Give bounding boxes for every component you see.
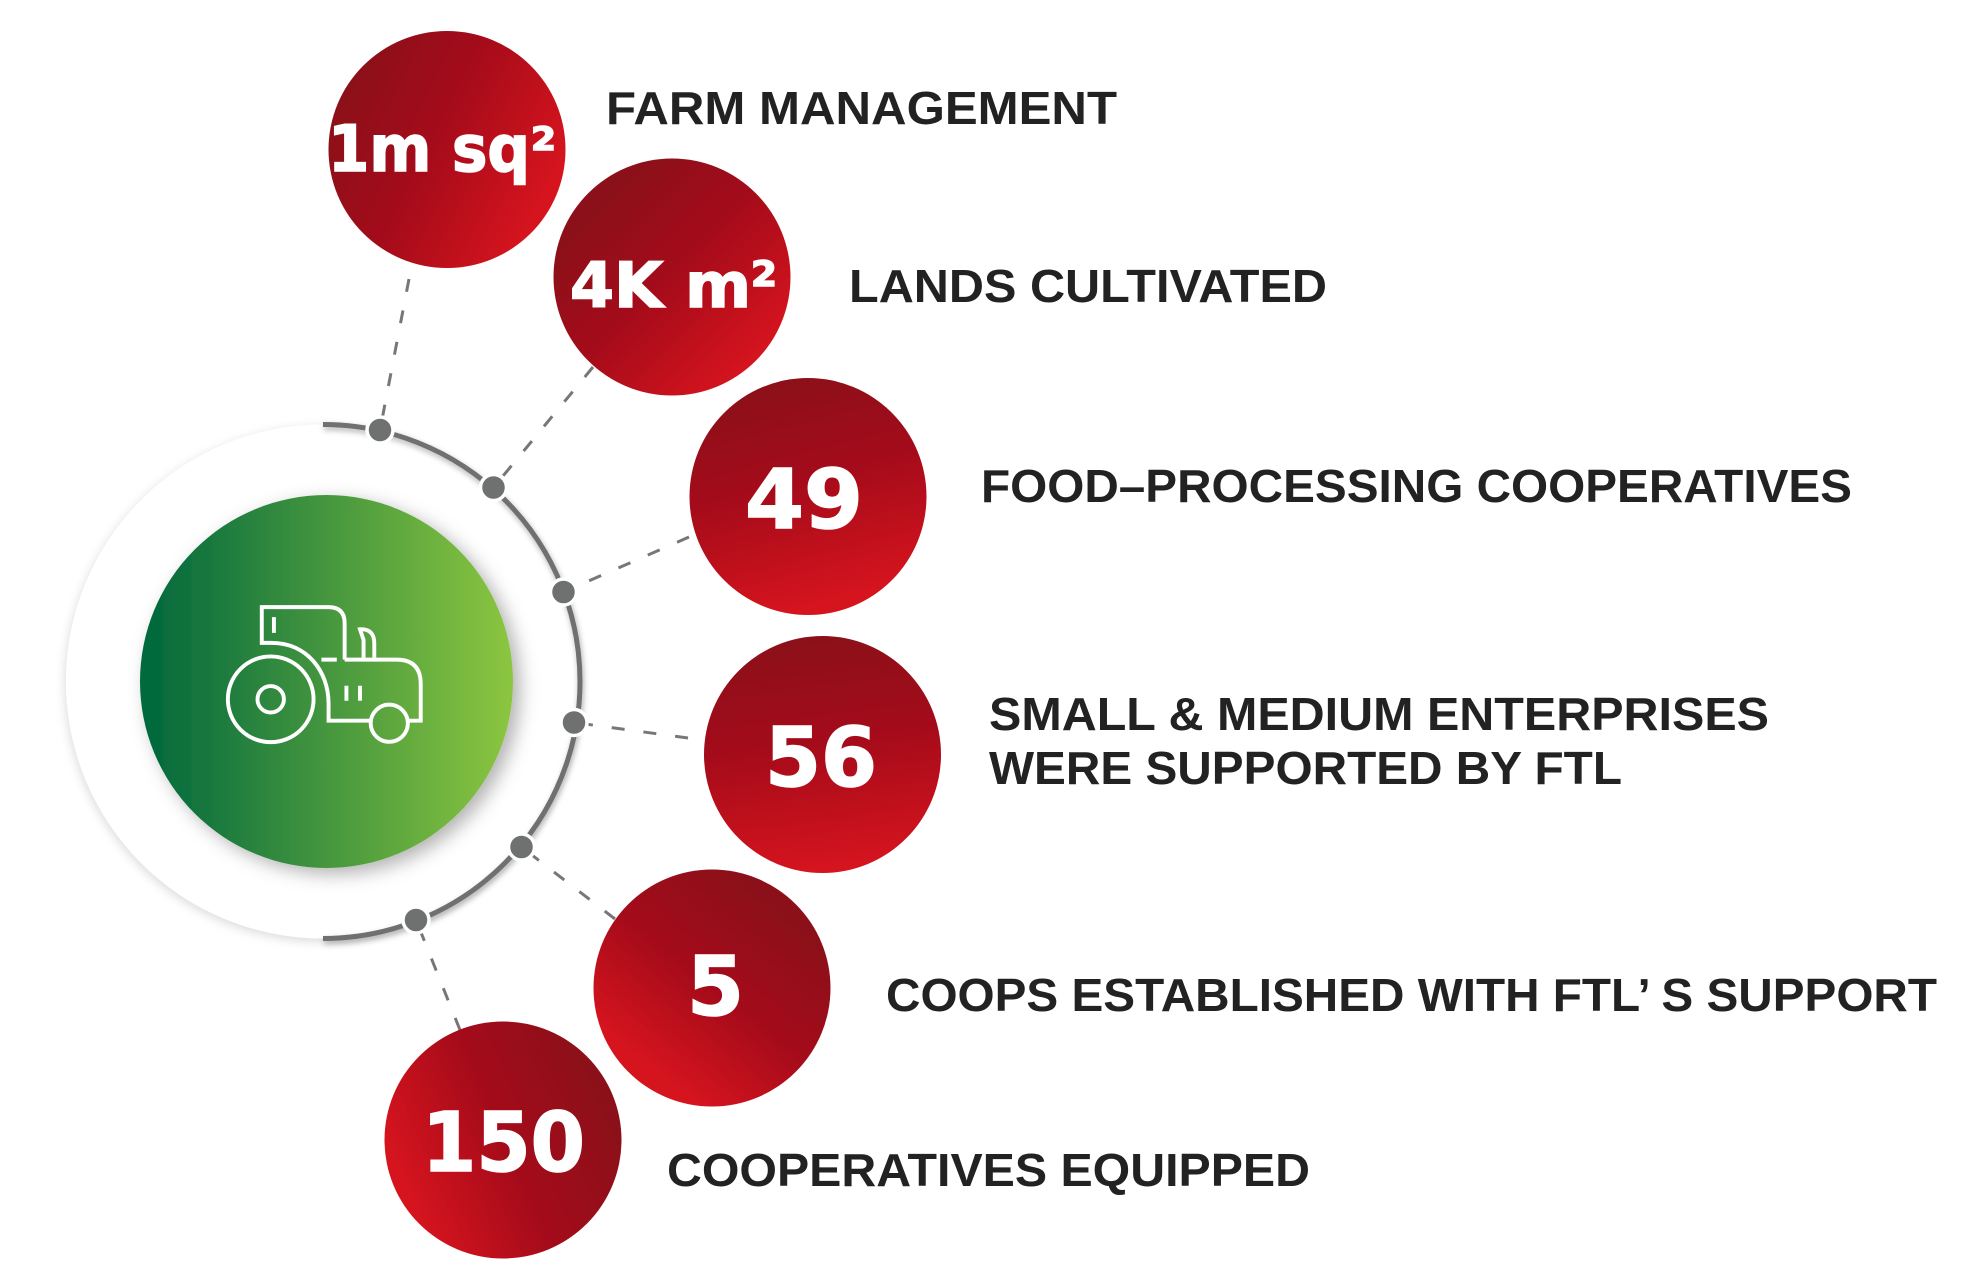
stat circle: 5: 5 [687,940,744,1035]
stat circle: 1m sq²: 1m sq [328,113,530,187]
stat circle: 1m sq²: 2 [531,120,556,158]
stat circle: 4K m²: 2 [751,255,777,295]
label: farm management: FARM MANAGEMENT [606,82,1117,134]
icon: tractor [228,607,421,742]
stat circle: 150 [384,1022,622,1258]
label: food-processing cooperatives: FOOD–PROCESSING COOPERATIVES [981,460,1852,512]
stat circle: 49: 49 [745,453,863,548]
stat circle: 150: 150 [422,1096,585,1191]
ring connection dots [367,417,587,933]
label: small and medium enterprises: SMALL & MEDIUM ENTERPRISES [989,688,1769,740]
stat circle: 4K m² [554,158,790,396]
label: small and medium enterprises [989,688,1769,794]
label: lands cultivated: LANDS CULTIVATED [849,260,1327,312]
stat circle: 56: 56 [765,711,877,806]
label: cooperatives equipped: COOPERATIVES EQUIPPED [667,1144,1310,1196]
stat circle: 49 [690,378,926,615]
label: small and medium enterprises: WERE SUPPORTED BY FTL [989,742,1622,794]
stat circle: 56 [704,636,941,873]
stat circle: 1m sq² [328,31,566,268]
green centre circle [140,495,513,868]
connector: dashed lines from ring to circles [380,279,689,1030]
white ring disc [66,424,580,938]
stat circle: 5 [594,870,830,1106]
ring arc [323,424,580,938]
label: coops established: COOPS ESTABLISHED WITH FTL’ S SUPPORT [886,969,1937,1021]
stat circle: 4K m²: 4K m [570,249,751,322]
